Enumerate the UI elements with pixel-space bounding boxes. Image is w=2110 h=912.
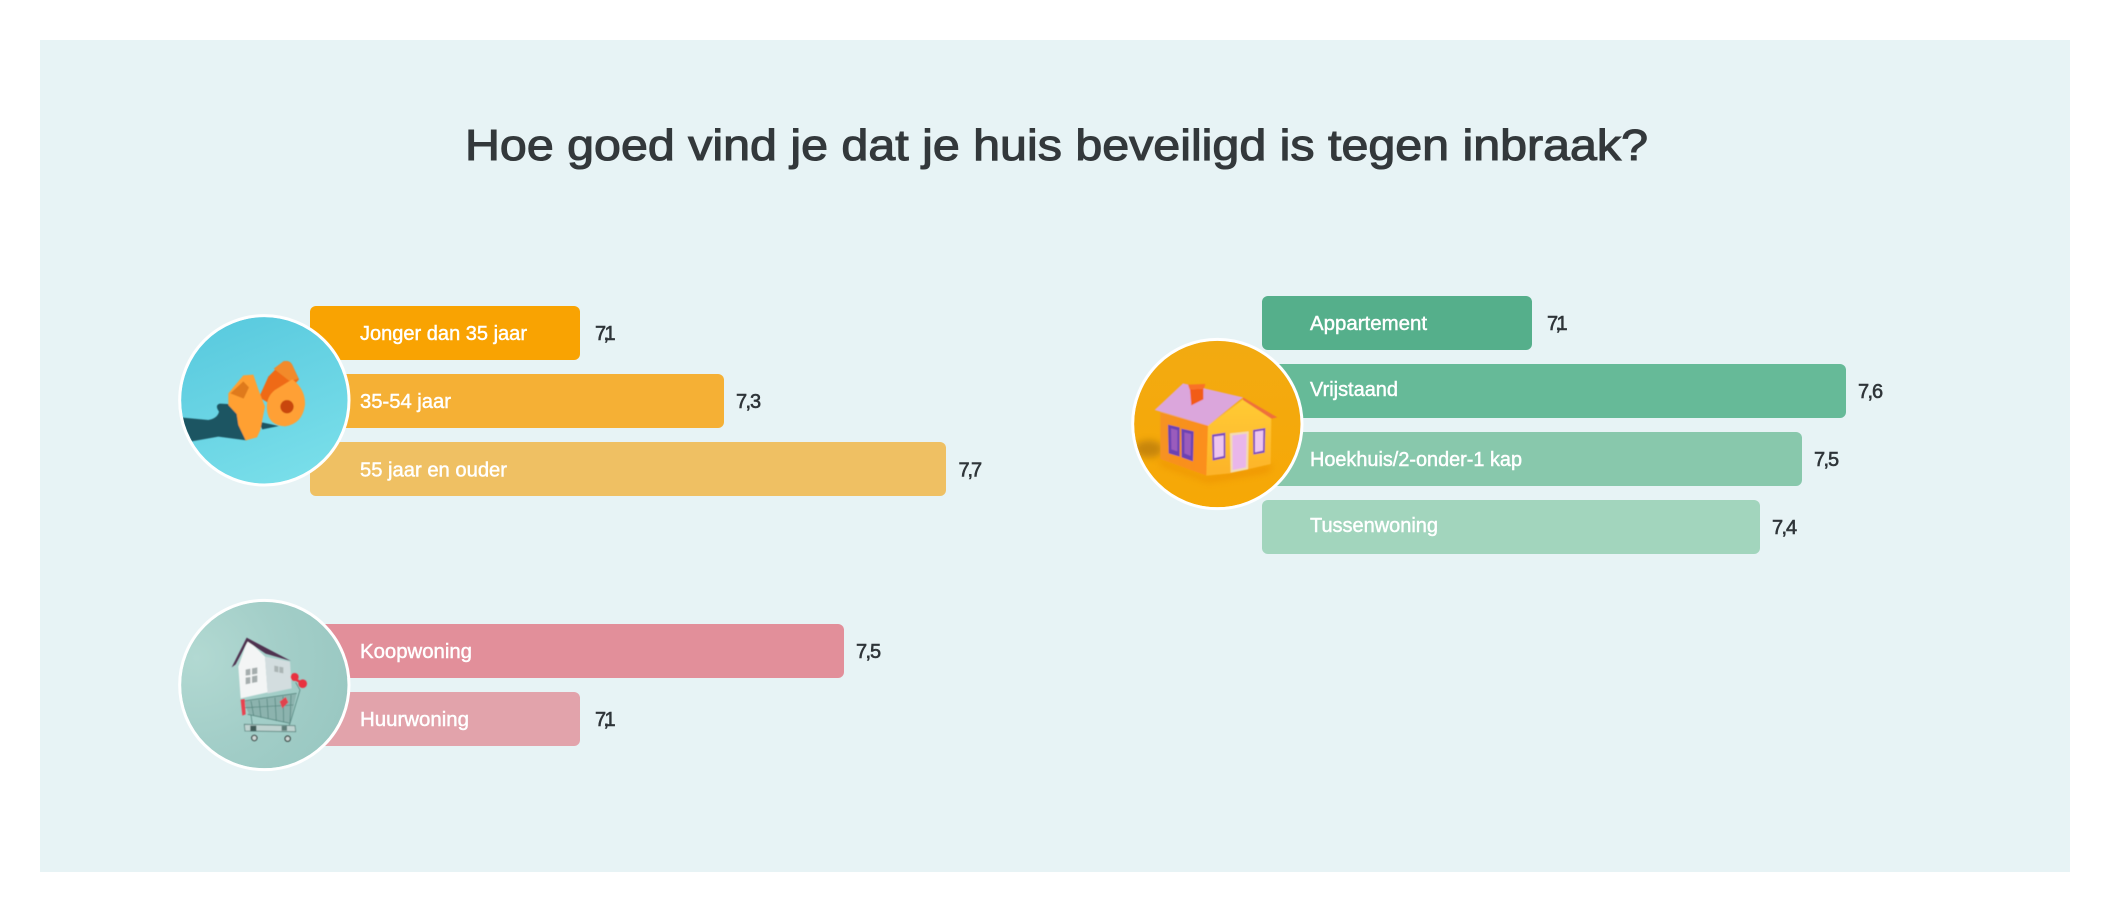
bar: Hoekhuis/2-onder-1 kap xyxy=(1262,432,1839,486)
bar: 55 jaar en ouder: 55 jaar en ouder xyxy=(360,460,507,482)
bar: Huurwoning: 7,1 xyxy=(595,709,616,731)
title: Hoe goed vind je dat je huis beveiligd is tegen inbraak? xyxy=(465,121,1648,170)
bar: 35-54 jaar: 7,3 xyxy=(736,391,761,413)
icon: orange toy house xyxy=(1128,334,1308,514)
bar: Appartement: 7,1 xyxy=(1547,313,1568,335)
panel: leeftijd (age groups) xyxy=(175,306,982,496)
bar: 35-54 jaar: 35-54 jaar xyxy=(360,391,451,413)
bar: Hoekhuis/2-onder-1 kap: 7,5 xyxy=(1814,449,1839,471)
bar: Hoekhuis/2-onder-1 kap: Hoekhuis/2-onder-1 kap xyxy=(1310,449,1522,471)
bar: Vrijstaand xyxy=(1262,364,1883,418)
bar: Koopwoning: 7,5 xyxy=(856,641,881,663)
bar: 55 jaar en ouder: 7,7 xyxy=(958,460,982,482)
icon: house in shopping cart xyxy=(175,595,355,775)
bar: Appartement: Appartement xyxy=(1310,313,1427,335)
bar: Appartement xyxy=(1262,296,1568,350)
bar: 35-54 jaar xyxy=(310,374,761,428)
bar: Tussenwoning: Tussenwoning xyxy=(1310,515,1438,537)
panel: eigendom (owner vs tenant) xyxy=(175,595,881,775)
bar: Tussenwoning xyxy=(1262,500,1797,554)
bar: Jonger dan 35 jaar: 7,1 xyxy=(595,323,616,345)
bar: Huurwoning xyxy=(310,692,616,746)
bar: Vrijstaand: 7,6 xyxy=(1858,381,1883,403)
bar: Huurwoning: Huurwoning xyxy=(360,709,469,731)
bar: Koopwoning: Koopwoning xyxy=(360,641,472,663)
bar: 55 jaar en ouder xyxy=(310,442,982,496)
bar: Koopwoning xyxy=(310,624,881,678)
bar: Jonger dan 35 jaar: Jonger dan 35 jaar xyxy=(360,323,527,345)
panel: woningtype (house type) xyxy=(1128,296,1883,554)
bar: Vrijstaand: Vrijstaand xyxy=(1310,379,1398,401)
bar: Jonger dan 35 jaar xyxy=(310,306,616,360)
bar: Tussenwoning: 7,4 xyxy=(1772,517,1797,539)
icon: foam number 16 on blue circle xyxy=(175,310,355,490)
